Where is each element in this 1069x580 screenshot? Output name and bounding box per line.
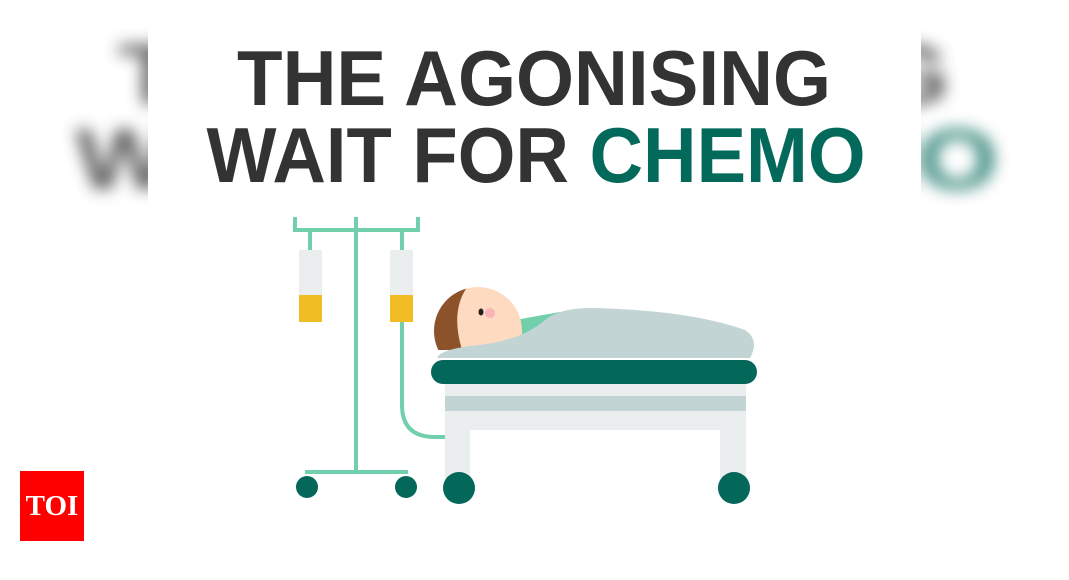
white panel bbox=[148, 0, 921, 580]
TOI logo bbox=[20, 471, 84, 541]
blurred background title: THE AGONISING bbox=[118, 26, 950, 122]
bed bbox=[431, 360, 757, 504]
IV pole bbox=[295, 217, 446, 498]
title bbox=[206, 40, 866, 190]
patient bbox=[434, 287, 754, 358]
blurred background title: WAIT FOR CHEMO bbox=[75, 111, 998, 207]
illustration: patient in hospital bed with IV drip bbox=[293, 217, 757, 504]
TOI logo: TOI bbox=[26, 490, 78, 522]
